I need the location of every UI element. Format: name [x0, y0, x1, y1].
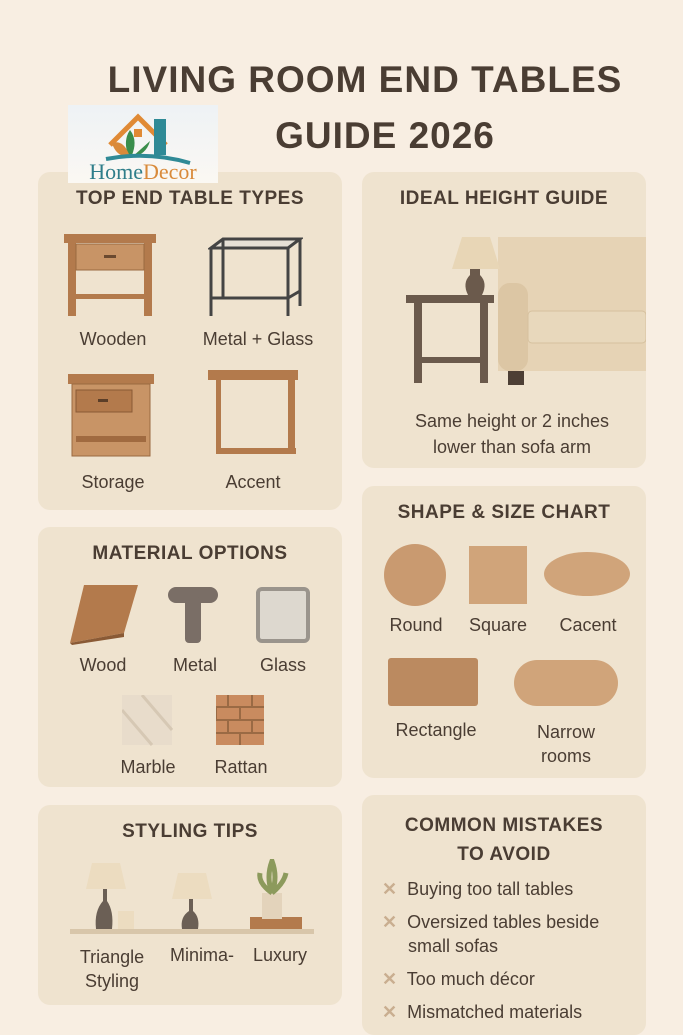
- icon: rectangle: [388, 658, 478, 706]
- panel: shape and size chart: [362, 486, 646, 778]
- panel: top end table types: Metal + Glass: [203, 329, 313, 349]
- list: mistakes: ✕ Too much décor: [382, 969, 535, 989]
- icon: glass: [256, 587, 310, 643]
- panel: top end table types: [38, 172, 342, 510]
- panel: top end table types: Storage: [81, 472, 145, 492]
- panel: styling tips: Luxury: [253, 945, 307, 965]
- panel: material options: Glass: [260, 655, 306, 675]
- icon: table lamp sofa illustration: [406, 237, 646, 385]
- text: height tip: Same height or 2 inches: [415, 411, 609, 431]
- icon: metal: [168, 587, 218, 643]
- list: mistakes: ✕ Oversized tables beside small sofas: [382, 912, 599, 956]
- panel: material options: [38, 527, 342, 787]
- panel: styling tips: Styling: [85, 971, 139, 991]
- panel: ideal height guide: [362, 172, 646, 468]
- logo: [68, 105, 218, 183]
- panel: top end table types: Wooden: [80, 329, 146, 349]
- panel: styling tips: STYLING TIPS: [122, 821, 258, 842]
- panel: ideal height guide: IDEAL HEIGHT GUIDE: [400, 188, 608, 209]
- panel: shape and size chart: Cacent: [559, 615, 617, 635]
- title: [108, 59, 622, 156]
- icon: storage table: [68, 374, 154, 456]
- title: LIVING ROOM END TABLES: [108, 59, 622, 100]
- text: height tip: [415, 411, 609, 457]
- icon: styling vignettes: [70, 859, 314, 934]
- panel: top end table types: Accent: [225, 472, 281, 492]
- list: mistakes: [382, 879, 599, 1022]
- icon: metal glass table: [208, 238, 303, 316]
- panel: material options: MATERIAL OPTIONS: [92, 543, 288, 564]
- icon: marble: [122, 695, 173, 746]
- icon: rattan: [216, 695, 264, 745]
- list: mistakes: ✕ Buying too tall tables: [382, 879, 573, 899]
- panel: material options: Wood: [80, 655, 126, 675]
- panel: material options: Metal: [173, 655, 217, 675]
- panel: shape and size chart: SHAPE & SIZE CHART: [398, 502, 610, 523]
- panel: common mistakes: [362, 795, 646, 1035]
- panel: material options: Rattan: [214, 757, 268, 777]
- icon: round: [384, 544, 446, 606]
- panel: shape and size chart: Narrow: [537, 722, 595, 742]
- panel: shape and size chart: Square: [469, 615, 527, 635]
- panel: material options: Marble: [120, 757, 176, 777]
- icon: accent C table: [208, 370, 298, 454]
- list: mistakes: ✕ Mismatched materials: [382, 1002, 582, 1022]
- icon: wood plank: [70, 585, 138, 645]
- panel: shape and size chart: rooms: [541, 746, 591, 766]
- panel: shape and size chart: Round: [389, 615, 443, 635]
- title: GUIDE 2026: [275, 115, 495, 156]
- panel: styling tips: [38, 805, 342, 1005]
- panel: common mistakes: COMMON MISTAKES: [405, 815, 603, 836]
- icon: oval: [544, 552, 630, 596]
- panel: top end table types: TOP END TABLE TYPES: [76, 188, 304, 209]
- icon: wooden table: [64, 234, 156, 316]
- text: height tip: lower than sofa arm: [433, 437, 591, 457]
- panel: styling tips: Minima-: [170, 945, 234, 965]
- icon: square: [469, 546, 527, 604]
- panel: shape and size chart: Rectangle: [395, 720, 477, 740]
- icon: narrow oval: [514, 660, 618, 706]
- panel: styling tips: Triangle: [80, 947, 144, 967]
- panel: common mistakes: TO AVOID: [457, 844, 551, 865]
